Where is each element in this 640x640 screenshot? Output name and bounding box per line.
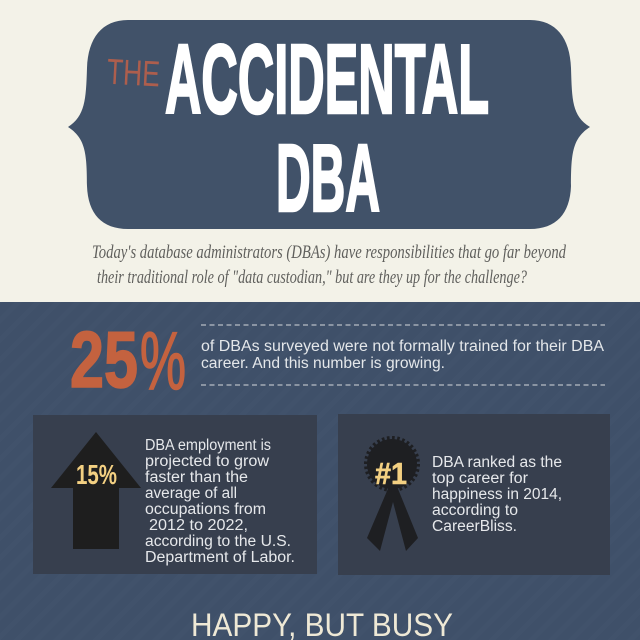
icon: up arrow bbox=[51, 432, 141, 549]
employment text: projected to grow bbox=[145, 453, 270, 470]
employment text bbox=[145, 437, 295, 566]
happiness text: CareerBliss. bbox=[432, 518, 517, 535]
stat description bbox=[201, 325, 605, 385]
employment text: average of all bbox=[145, 485, 237, 502]
employment text: occupations from bbox=[145, 501, 266, 518]
badge label: number one: #1 bbox=[375, 456, 407, 491]
stat description: career. And this number is growing. bbox=[201, 355, 445, 372]
intro text bbox=[92, 242, 566, 288]
stat: 25 percent: % bbox=[140, 316, 186, 407]
title: the: THE bbox=[106, 51, 161, 94]
employment text: according to the U.S. bbox=[145, 533, 291, 550]
happiness text: according to bbox=[432, 502, 518, 519]
employment text: Department of Labor. bbox=[145, 549, 295, 566]
employment text: 2012 to 2022, bbox=[149, 517, 248, 534]
happiness text: top career for bbox=[432, 470, 528, 487]
title banner shape bbox=[68, 20, 590, 229]
happiness text: DBA ranked as the bbox=[432, 454, 562, 471]
panel: career happiness bbox=[338, 414, 610, 575]
happiness text: happiness in 2014, bbox=[432, 486, 562, 503]
dark section background bbox=[0, 302, 640, 640]
title: dba: DBA bbox=[276, 125, 380, 232]
header background bbox=[0, 0, 640, 302]
stat: 25 percent: 25 bbox=[70, 315, 138, 404]
arrow label: 15 percent: 15% bbox=[76, 459, 117, 490]
happiness text bbox=[432, 454, 562, 535]
stat description: of DBAs surveyed were not formally trained for their DBA bbox=[201, 338, 605, 355]
panel: employment growth bbox=[33, 415, 317, 574]
employment text: faster than the bbox=[145, 469, 248, 486]
employment text: DBA employment is bbox=[145, 437, 271, 454]
icon: ribbon badge bbox=[366, 438, 418, 551]
